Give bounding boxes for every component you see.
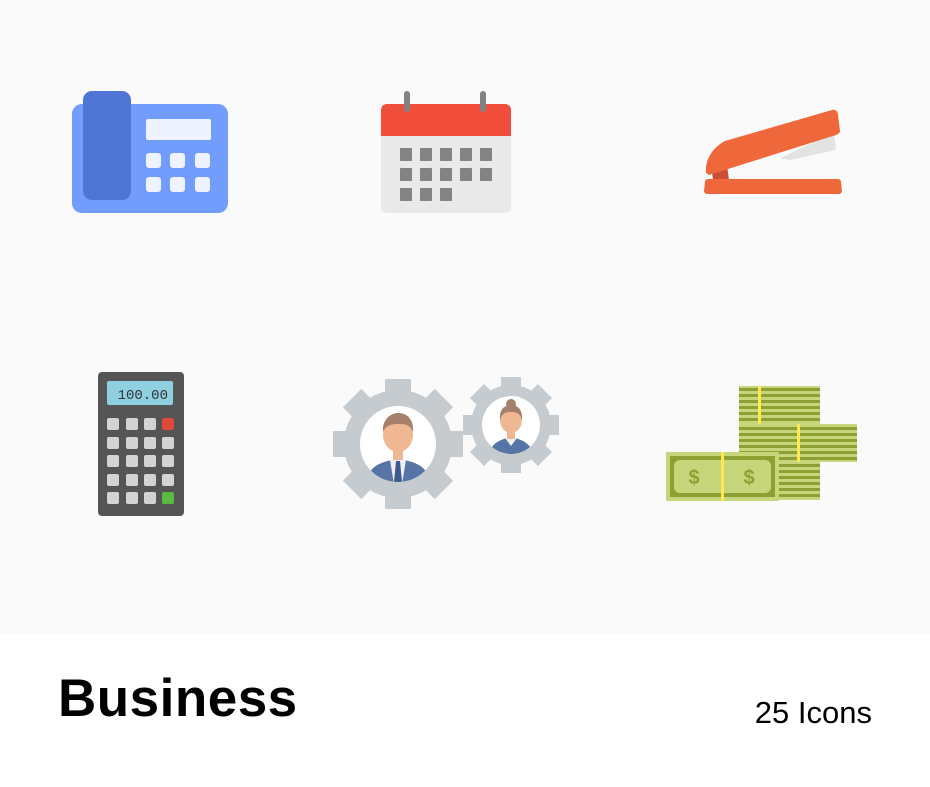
icon: money stacks: $ — [743, 467, 755, 489]
icon: gears with people — [333, 377, 559, 509]
icon: calendar — [381, 91, 511, 213]
icon: money stacks: $ — [688, 467, 700, 489]
icon: phone — [72, 91, 228, 213]
title: Business — [58, 669, 298, 728]
icon count: 25 Icons — [755, 695, 872, 730]
icon: calculator — [98, 372, 184, 516]
icon: money stacks — [666, 386, 857, 501]
icon: stapler — [704, 110, 842, 194]
icon: calculator: 100.00 — [118, 388, 168, 404]
icon grid panel — [72, 91, 857, 516]
